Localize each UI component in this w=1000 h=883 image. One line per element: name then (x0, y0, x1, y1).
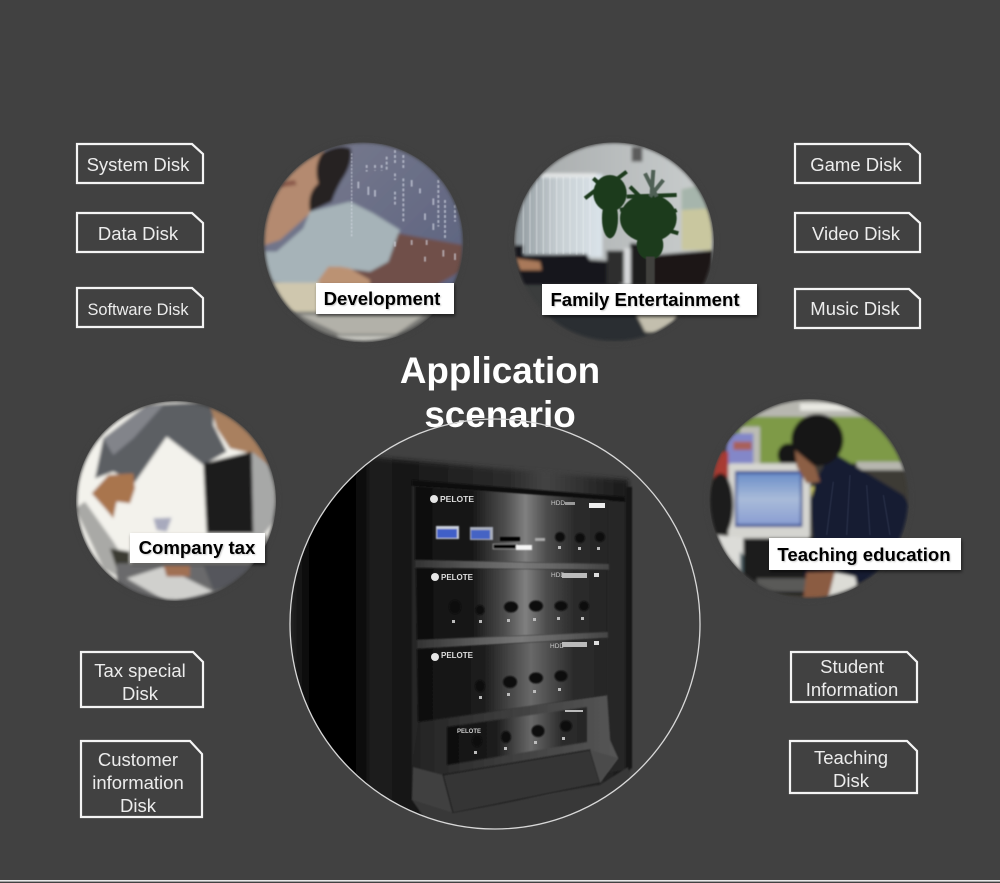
tag: software disk: Software Disk (87, 301, 189, 319)
heading (400, 350, 600, 435)
icon: code rain (352, 150, 455, 262)
tag: customer information disk: Customer (98, 749, 178, 770)
tag: customer information disk (81, 741, 202, 817)
label: development (316, 283, 454, 314)
label: teaching education (769, 538, 961, 570)
tag: system disk: System Disk (87, 154, 190, 175)
tag: customer information disk: Disk (120, 795, 157, 816)
soft circle edges (75, 141, 910, 602)
tag: music disk (795, 289, 920, 328)
server bay 4 (447, 707, 587, 765)
heading: Application (400, 350, 600, 391)
tag: teaching disk: Disk (833, 770, 870, 791)
photo: teaching education (710, 399, 909, 599)
icon: shirt stripes (827, 475, 890, 535)
tag: student information (791, 652, 917, 702)
server bay 2 (416, 568, 608, 649)
server bay 4: PELOTE (457, 729, 481, 735)
tag: system disk (77, 144, 203, 183)
server bay 1 (415, 486, 609, 570)
label: teaching education: Teaching education (777, 544, 951, 565)
server bay 3: PELOTE (441, 651, 474, 660)
tag: data disk (77, 213, 203, 252)
tag: data disk: Data Disk (98, 223, 179, 244)
server bay 2: PELOTE (441, 573, 474, 582)
label: family entertainment: Family Entertainment (550, 289, 740, 310)
tag: teaching disk (790, 741, 917, 793)
server bay 3 (417, 638, 607, 722)
photo: company tax (76, 401, 276, 601)
tag: tax special disk (81, 652, 203, 707)
tag: customer information disk: information (92, 772, 184, 793)
server bay 3: HDD (550, 643, 564, 650)
label: company tax: Company tax (139, 537, 256, 558)
big circle outline (290, 419, 700, 829)
tag: teaching disk: Teaching (814, 747, 888, 768)
tag: game disk (795, 144, 920, 183)
tower left shadow (290, 462, 370, 786)
tag: tax special disk: Disk (122, 683, 159, 704)
label: company tax (130, 533, 265, 563)
tower base (412, 748, 629, 828)
server bay 1: HDD (551, 500, 565, 507)
tag: tax special disk: Tax special (94, 660, 186, 681)
tag: video disk: Video Disk (812, 223, 901, 244)
tag: student information: Information (806, 679, 898, 700)
icon: plants (585, 170, 678, 285)
server bay 2: HDD (551, 572, 565, 579)
tag: music disk: Music Disk (810, 298, 900, 319)
tag: game disk: Game Disk (810, 154, 902, 175)
label: family entertainment (542, 284, 757, 315)
server bay 1: PELOTE (440, 494, 474, 504)
label: development: Development (324, 288, 440, 309)
panel: server photo (285, 419, 700, 845)
photo: development (260, 140, 467, 347)
footer rule (0, 880, 1000, 882)
heading: scenario (424, 394, 576, 435)
photo: family entertainment (510, 140, 723, 347)
tag: student information: Student (820, 656, 884, 677)
icon: blinds (523, 177, 590, 255)
tag: software disk (77, 288, 203, 327)
tag: video disk (795, 213, 920, 252)
